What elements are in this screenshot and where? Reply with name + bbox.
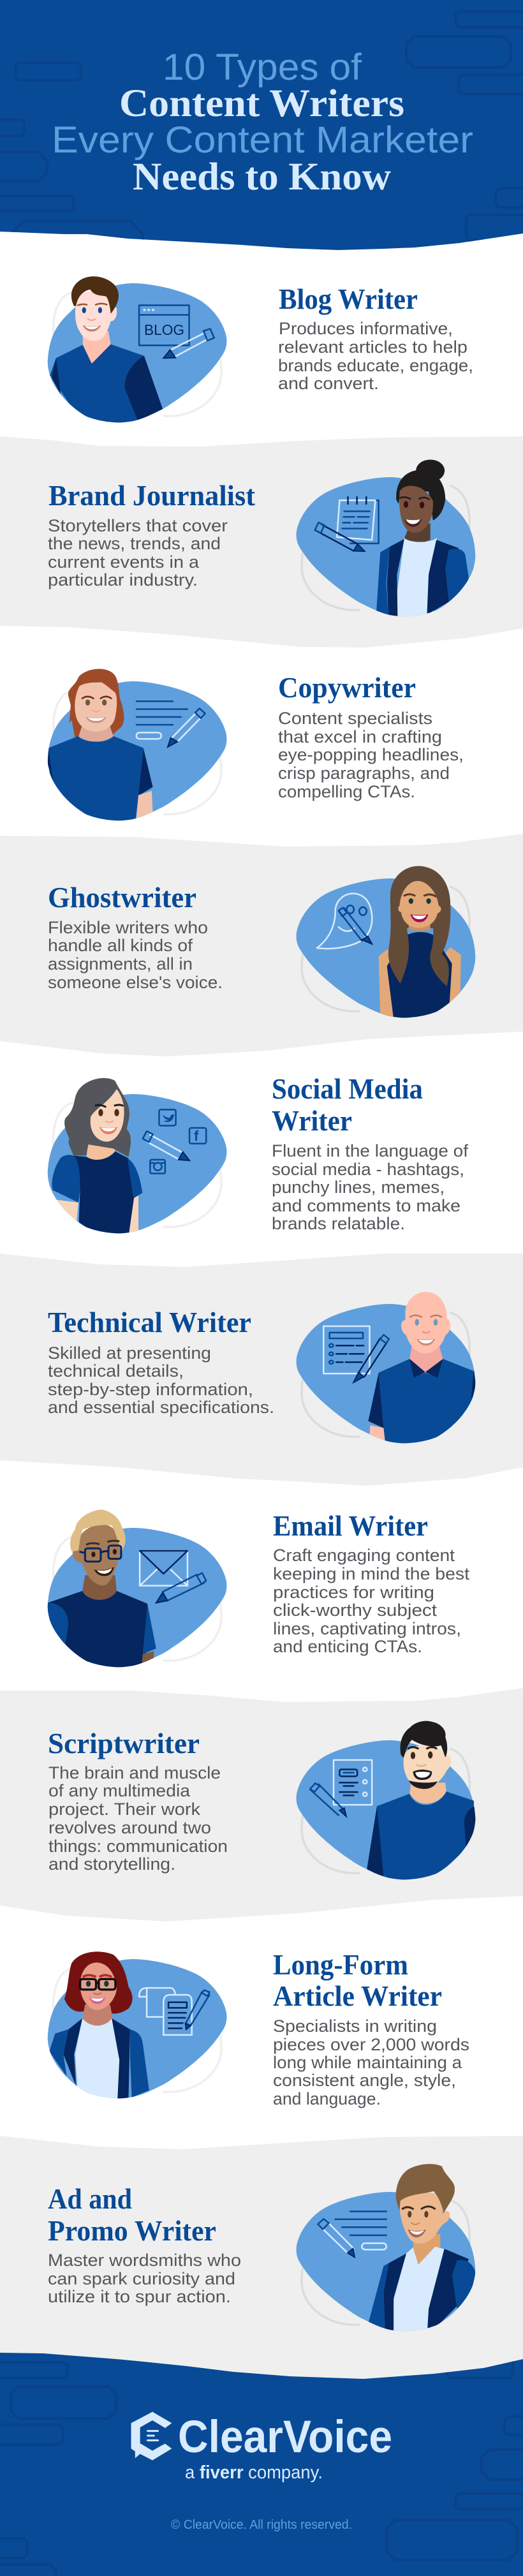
panel: long-form article writer <box>48 1948 469 2108</box>
illustration: technical writer <box>297 1292 476 1446</box>
description: relevant articles to help <box>278 337 468 357</box>
description <box>278 319 473 393</box>
description: Craft engaging content <box>273 1546 455 1565</box>
figure: bald man <box>368 1292 476 1446</box>
description: project. Their work <box>48 1800 201 1819</box>
icon: social media squares and pencil: f <box>194 1128 199 1144</box>
description: long while maintaining a <box>273 2053 462 2072</box>
description: step-by-step information, <box>48 1380 253 1399</box>
description: someone else's voice. <box>48 973 223 992</box>
title <box>52 47 473 198</box>
description: click-worthy subject <box>273 1601 438 1620</box>
illustration: scriptwriter <box>297 1721 476 1883</box>
icon: script page and pencil <box>310 1760 372 1816</box>
panel: ghostwriter <box>48 866 475 1019</box>
description: and essential specifications. <box>48 1398 274 1417</box>
icon: speech bubble mark <box>131 2412 172 2461</box>
heading <box>273 1948 442 2012</box>
logo: ClearVoice <box>131 2412 392 2462</box>
description <box>48 2251 241 2306</box>
heading: Ghostwriter <box>48 881 196 914</box>
description: eye-popping headlines, <box>278 745 464 764</box>
figure: man with dark hair and goatee <box>367 1721 476 1883</box>
header banner <box>0 0 523 250</box>
description: and language. <box>273 2089 381 2108</box>
panel: blog writer <box>48 276 473 425</box>
illustration: ghostwriter <box>297 866 475 1019</box>
description: punchy lines, memes, <box>272 1178 445 1197</box>
description <box>273 2017 469 2108</box>
heading: Long-Form <box>273 1948 408 1981</box>
illustration: social media writer <box>48 1078 226 1237</box>
heading: Blog Writer <box>279 283 418 315</box>
description: compelling CTAs. <box>278 782 415 801</box>
description: and comments to make <box>272 1196 460 1215</box>
heading: Writer <box>272 1104 352 1137</box>
description: particular industry. <box>48 570 198 589</box>
illustration: long-form article writer <box>48 1951 226 2101</box>
description: things: communication <box>48 1837 228 1856</box>
description <box>48 1763 228 1874</box>
panel: copywriter <box>48 669 464 825</box>
figure: woman with long brown hair <box>379 866 461 1019</box>
icon: social media squares and pencil <box>143 1109 206 1174</box>
icon: blog page and pencil <box>139 305 214 358</box>
description: pieces over 2,000 words <box>273 2035 469 2054</box>
description: technical details, <box>48 1361 184 1381</box>
figure: man with brown hair <box>50 276 163 425</box>
icon: ghost and pencil <box>317 894 372 949</box>
description: current events in a <box>48 552 199 572</box>
icon: notepad and pencil <box>315 497 379 551</box>
description: that excel in crafting <box>278 727 442 746</box>
description: Flexible writers who <box>48 918 208 937</box>
icon: scroll, document and pencil <box>139 1988 209 2035</box>
figure: man with blond hair and glasses <box>48 1509 156 1669</box>
description: brands relatable. <box>272 1214 405 1233</box>
heading: Article Writer <box>273 1980 442 2012</box>
gray section bands <box>0 436 523 2386</box>
heading: Social Media <box>272 1072 423 1105</box>
description: and storytelling. <box>48 1854 175 1874</box>
description: The brain and muscle <box>48 1763 221 1782</box>
figure: woman with red hair and glasses <box>49 1951 149 2101</box>
description: handle all kinds of <box>48 936 193 955</box>
heading: Ad and <box>48 2182 132 2215</box>
heading: Brand Journalist <box>48 479 256 512</box>
illustration: copywriter <box>48 669 226 825</box>
description: practices for writing <box>273 1583 434 1602</box>
heading: Promo Writer <box>48 2214 216 2247</box>
description: of any multimedia <box>48 1781 190 1800</box>
heading: Scriptwriter <box>48 1727 200 1759</box>
description <box>48 1344 274 1417</box>
title: 10 Types of <box>163 47 362 88</box>
figure: woman with hair bun <box>376 459 469 619</box>
icon: text lines and pencil <box>136 701 205 747</box>
description <box>278 709 464 801</box>
copyright: © ClearVoice. All rights reserved. <box>171 2518 352 2532</box>
description: Fluent in the language of <box>272 1141 469 1160</box>
title: Content Writers <box>119 82 404 125</box>
description: Specialists in writing <box>273 2017 437 2036</box>
heading: Email Writer <box>273 1509 428 1542</box>
illustration: brand journalist <box>297 459 475 619</box>
heading <box>272 1072 423 1137</box>
figure: man with swept brown hair <box>369 2164 475 2337</box>
heading <box>48 2182 216 2247</box>
description <box>272 1141 469 1233</box>
heading: Copywriter <box>278 671 416 704</box>
description: Skilled at presenting <box>48 1344 211 1363</box>
icon: text lines and pencil <box>318 2212 387 2257</box>
wordmark: ClearVoice <box>178 2412 392 2462</box>
description: consistent angle, style, <box>273 2071 456 2090</box>
description: can spark curiosity and <box>48 2269 235 2288</box>
description: Content specialists <box>278 709 432 728</box>
description: Storytellers that cover <box>48 516 228 535</box>
title: Needs to Know <box>133 156 391 198</box>
illustration: email writer <box>48 1509 226 1669</box>
description <box>273 1546 470 1656</box>
icon: envelope and pencil <box>140 1551 206 1603</box>
panel: ad and promo writer <box>48 2164 475 2337</box>
panel: scriptwriter <box>48 1721 476 1883</box>
description: lines, captivating intros, <box>273 1619 461 1638</box>
panel: brand journalist <box>48 459 475 619</box>
icon: spec sheet and pencil <box>323 1326 389 1382</box>
icon: blog page and pencil: BLOG <box>144 322 184 338</box>
description: Produces informative, <box>279 319 453 338</box>
tagline: a fiverr company. <box>185 2462 323 2483</box>
description: brands educate, engage, <box>278 356 473 375</box>
description: assignments, all in <box>48 954 193 973</box>
description: revolves around two <box>48 1818 211 1837</box>
description: Master wordsmiths who <box>48 2251 241 2270</box>
figure: woman with wavy gray hair <box>52 1078 142 1237</box>
panel: social media writer <box>48 1072 469 1237</box>
description <box>48 918 223 992</box>
panel: email writer <box>48 1509 470 1669</box>
description: and convert. <box>278 374 379 393</box>
description: social media - hashtags, <box>272 1160 464 1179</box>
heading: Technical Writer <box>48 1306 251 1338</box>
description: utilize it to spur action. <box>48 2287 231 2306</box>
description: and enticing CTAs. <box>273 1637 422 1656</box>
figure: man with long auburn hair <box>48 669 153 825</box>
illustration: ad and promo writer <box>297 2164 475 2337</box>
footer banner <box>0 2353 523 2576</box>
description: keeping in mind the best <box>273 1564 470 1583</box>
description: the news, trends, and <box>48 534 221 553</box>
description <box>48 516 228 589</box>
description: crisp paragraphs, and <box>278 764 450 783</box>
title: Every Content Marketer <box>52 119 473 161</box>
panel: technical writer <box>48 1292 476 1446</box>
illustration: blog writer <box>48 276 226 425</box>
